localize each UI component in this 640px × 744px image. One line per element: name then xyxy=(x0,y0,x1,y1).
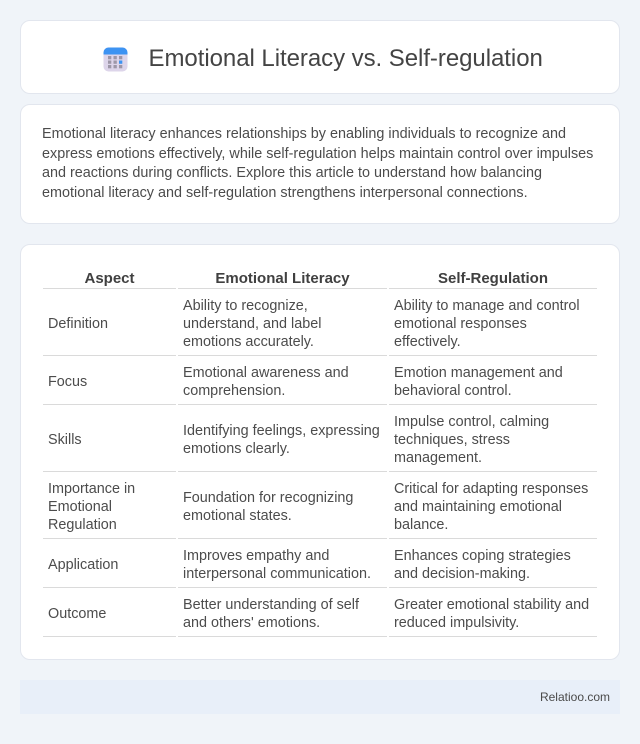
row: Importance in Emotional Regulation: Critical for adapting responses xyxy=(394,481,588,497)
row: Outcome xyxy=(48,597,589,631)
row: Skills: Impulse control, calming xyxy=(394,414,549,430)
row: Outcome: Outcome xyxy=(48,606,106,622)
row: Outcome: Greater emotional stability and xyxy=(394,597,589,613)
row: Focus: Emotional awareness and xyxy=(183,365,349,381)
row: Importance in Emotional Regulation: balance. xyxy=(394,517,448,533)
row: Outcome: Better understanding of self xyxy=(183,597,359,613)
row: Focus: comprehension. xyxy=(183,383,285,399)
row: Importance in Emotional Regulation: and maintaining emotional xyxy=(394,499,562,515)
column header: Emotional Literacy: Emotional Literacy xyxy=(215,270,350,287)
row: Definition: understand, and label xyxy=(183,316,321,332)
intro text: and reactions during conflicts. Explore this article to understand how balancing xyxy=(42,165,542,181)
row: Importance in Emotional Regulation: Emotional xyxy=(48,499,112,515)
row: Focus: behavioral control. xyxy=(394,383,512,399)
row: Application xyxy=(48,548,571,582)
footer bar xyxy=(20,680,620,714)
row: Definition: Ability to recognize, xyxy=(183,298,308,314)
row: Skills: Skills xyxy=(48,432,82,448)
row: Skills: management. xyxy=(394,450,482,466)
row: Definition: emotional responses xyxy=(394,316,527,332)
column header: Aspect: Aspect xyxy=(84,270,135,287)
row: Application: interpersonal communication. xyxy=(183,566,371,582)
title: Emotional Literacy vs. Self-regulation xyxy=(148,44,543,72)
row: Application: Enhances coping strategies xyxy=(394,548,571,564)
intro text xyxy=(42,126,593,201)
row: Importance in Emotional Regulation: Importance in xyxy=(48,481,135,497)
row: Outcome: reduced impulsivity. xyxy=(394,615,519,631)
row: Focus: Focus xyxy=(48,374,87,390)
icon: calendar xyxy=(104,48,128,72)
row: Skills: emotions clearly. xyxy=(183,441,290,457)
row: Definition xyxy=(48,298,580,350)
row: Application: Application xyxy=(48,557,118,573)
intro text: Emotional literacy enhances relationships by enabling individuals to recognize and xyxy=(42,126,566,142)
row: Definition: Ability to manage and control xyxy=(394,298,580,314)
intro text: express emotions effectively, while self-regulation helps maintain control over impulses xyxy=(42,146,593,162)
intro panel xyxy=(20,104,620,224)
row: Skills: techniques, stress xyxy=(394,432,510,448)
column header: Self-Regulation: Self-Regulation xyxy=(438,270,548,287)
row: Focus: Emotion management and xyxy=(394,365,563,381)
row: Application: and decision-making. xyxy=(394,566,530,582)
intro text: emotional literacy and self-regulation strengthens interpersonal connections. xyxy=(42,185,528,201)
row: Skills xyxy=(48,414,549,466)
header panel xyxy=(20,20,620,94)
row: Outcome: and others' emotions. xyxy=(183,615,320,631)
row: Importance in Emotional Regulation: Regulation xyxy=(48,517,117,533)
row: Skills: Identifying feelings, expressing xyxy=(183,423,380,439)
row: Importance in Emotional Regulation: emotional states. xyxy=(183,508,292,524)
row: Focus xyxy=(48,365,563,399)
row: Definition: effectively. xyxy=(394,334,461,350)
row: Definition: Definition xyxy=(48,316,108,332)
footer text: Relatioo.com xyxy=(540,690,610,704)
row: Application: Improves empathy and xyxy=(183,548,329,564)
row: Importance in Emotional Regulation xyxy=(48,481,588,533)
row: Importance in Emotional Regulation: Foundation for recognizing xyxy=(183,490,353,506)
comparison table panel xyxy=(20,244,620,660)
row: Definition: emotions accurately. xyxy=(183,334,314,350)
